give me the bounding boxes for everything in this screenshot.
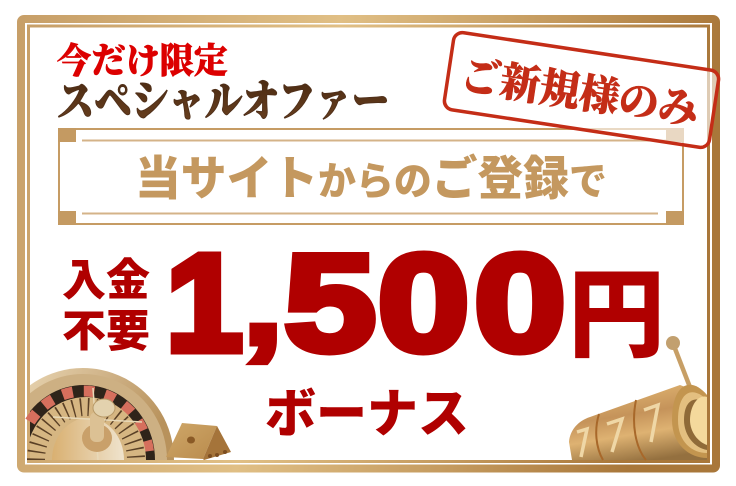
heading: limited time: 今だけ限定	[57, 42, 228, 81]
sevens	[577, 405, 658, 457]
banner text: 当サイトからのご登録で	[135, 152, 607, 205]
icon: roulette wheel	[30, 368, 174, 460]
label: bonus: ボーナス	[265, 386, 469, 444]
bonus amount: 1	[166, 226, 243, 380]
label: no deposit required	[62, 256, 150, 356]
spinner	[53, 388, 142, 460]
icon: gold die	[166, 423, 231, 460]
bonus amount: 500	[284, 226, 566, 380]
panel: registration banner	[58, 128, 684, 225]
lever	[666, 336, 693, 395]
label: no deposit required: 不要	[62, 307, 150, 356]
bonus amount: ,	[243, 236, 283, 370]
yen symbol: 円	[568, 261, 665, 370]
stamp text: ご新規様のみ	[457, 52, 702, 133]
icon: slot machine	[569, 336, 707, 460]
bonus amount	[166, 226, 665, 380]
label: no deposit required: 入金	[62, 256, 150, 305]
heading: special offer: スペシャルオファー	[57, 77, 389, 126]
stamp: new customers only	[443, 31, 720, 149]
